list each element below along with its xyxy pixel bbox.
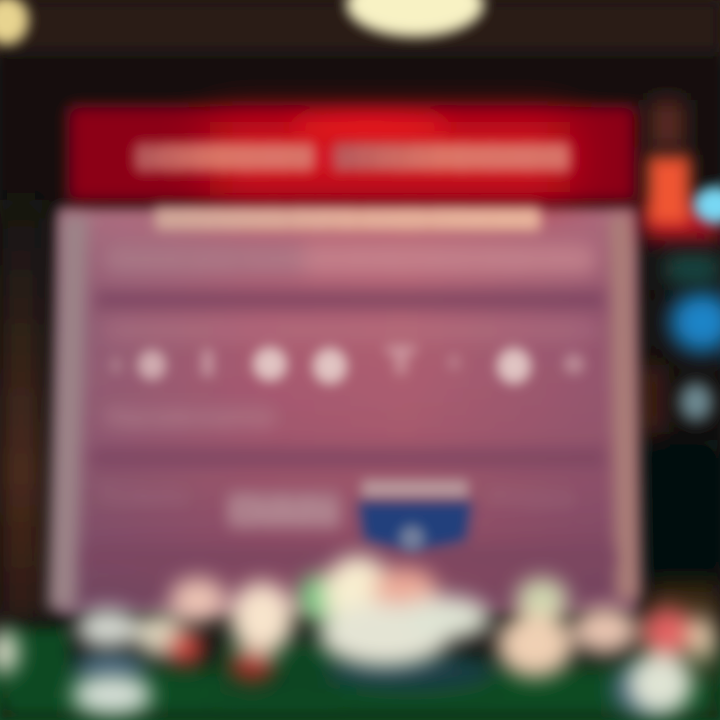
subtitle: WINNING TIPS AND TRICKS (158, 206, 538, 233)
ceiling lights (0, 0, 483, 44)
icon: cyan circle (694, 187, 720, 223)
board body text: Play with a group (105, 408, 275, 429)
board light bands (105, 243, 595, 426)
green table (0, 628, 720, 720)
blue sign (358, 480, 472, 551)
panel: red header banner (68, 106, 636, 202)
title: LOTTERY STRATEGIES (134, 139, 570, 181)
pile of lottery tickets (0, 556, 716, 715)
board frame (48, 215, 640, 610)
grey icon (680, 383, 712, 421)
board body text (105, 250, 595, 429)
blue screen (670, 292, 720, 352)
lower text blocks: Odds (228, 491, 340, 533)
row of number dots (112, 345, 584, 384)
ticket shadows (74, 652, 670, 714)
right side signs (644, 100, 720, 421)
lower text blocks (98, 483, 575, 533)
panel: lottery board (48, 208, 640, 613)
board body (58, 208, 636, 613)
lower text blocks: Tickets (98, 483, 188, 510)
lower text blocks: Prizes (490, 485, 575, 512)
board text stripes (85, 290, 615, 568)
board body text: Choose your numbers wisely every single draw (105, 250, 595, 271)
red sign (644, 205, 720, 240)
ticket blobs (0, 556, 716, 715)
